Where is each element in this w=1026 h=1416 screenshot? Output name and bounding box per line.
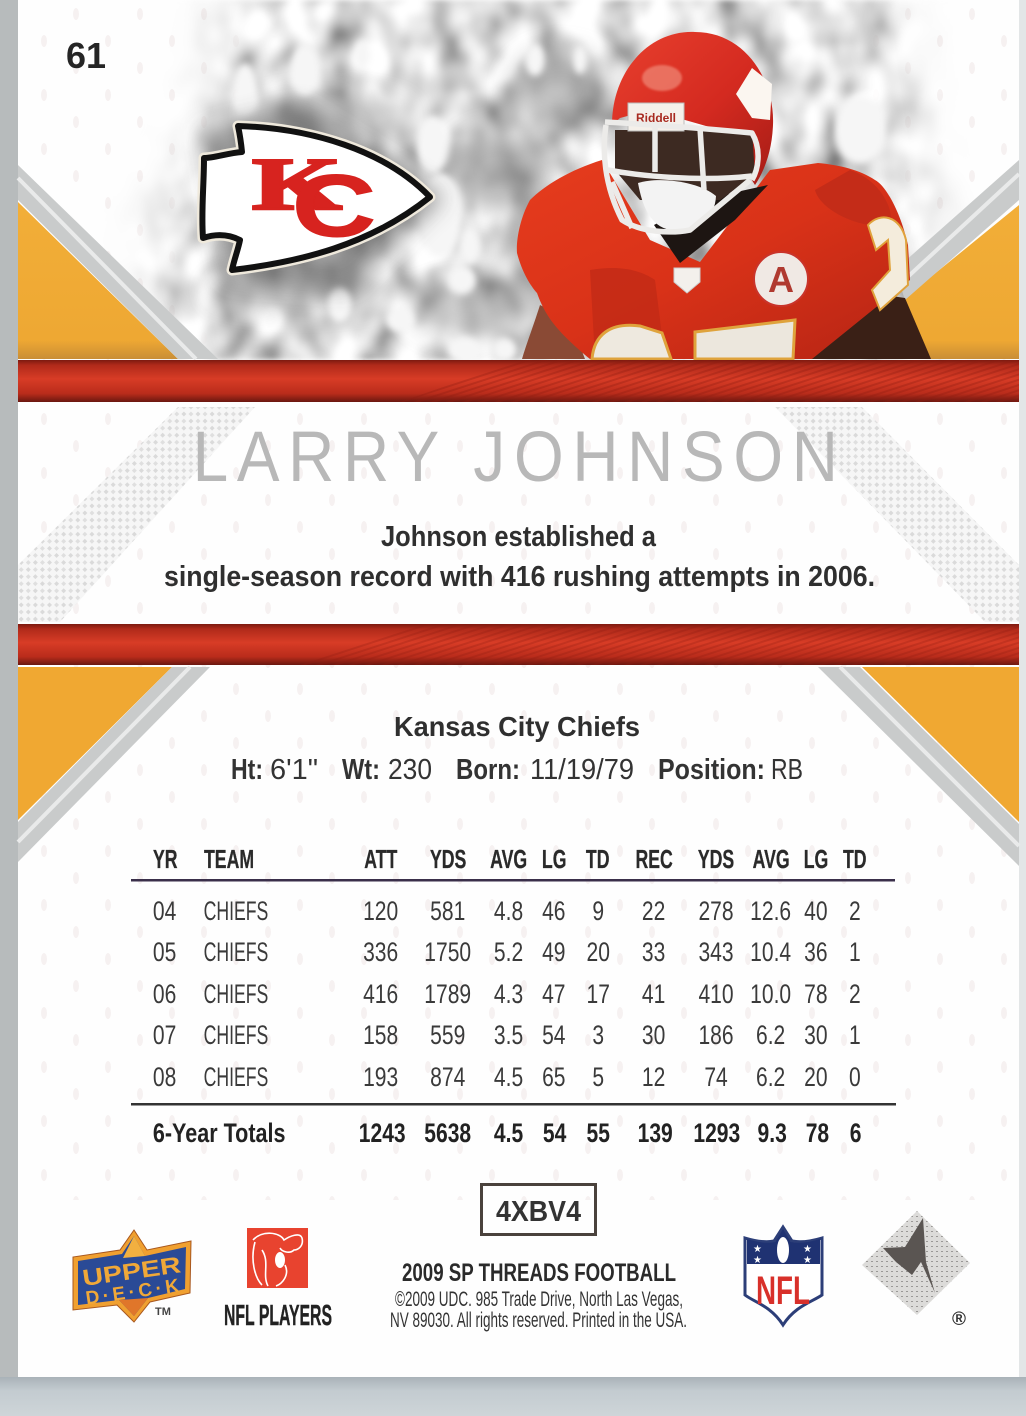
row 05: 336	[363, 938, 398, 968]
Riddell bumper: Riddell	[636, 111, 676, 125]
shoulder shading	[815, 170, 891, 226]
copyright: NV 89030. All rights reserved. Printed in the USA.	[390, 1309, 687, 1332]
bio text	[164, 521, 875, 593]
NFL Players logo	[224, 1228, 332, 1332]
table header: YDS	[430, 845, 466, 874]
row 08: 65	[542, 1063, 566, 1093]
table header: AVG	[490, 845, 527, 874]
panel: photo header	[18, 0, 1019, 402]
silver chevron: bottom right	[818, 667, 1019, 866]
left arm	[522, 305, 585, 359]
player vitals: Wt:	[342, 754, 380, 786]
helmet logo decal	[736, 68, 772, 120]
jersey	[517, 160, 910, 359]
team logo: Chiefs arrowhead	[200, 105, 445, 290]
row 08: 874	[430, 1063, 465, 1093]
set title: 2009 SP THREADS FOOTBALL	[402, 1259, 676, 1287]
totals row: 139	[638, 1119, 673, 1149]
row 07: 3.5	[494, 1021, 523, 1051]
table header: TEAM	[204, 845, 254, 874]
row 05: 1	[849, 938, 861, 968]
player vitals: 6'1"	[270, 754, 318, 786]
copyright: ©2009 UDC. 985 Trade Drive, North Las Vegas,	[395, 1288, 683, 1311]
NFL collar shield	[674, 268, 700, 293]
row 05: 20	[587, 938, 610, 968]
row 08: 4.5	[494, 1063, 523, 1093]
row 04: 04	[153, 897, 176, 927]
player vitals: Ht:	[231, 754, 263, 786]
copyright	[390, 1288, 687, 1332]
row 04: 9	[592, 897, 604, 927]
bio text: single-season record with 416 rushing attempts in 2006.	[164, 561, 875, 593]
red band: top	[18, 360, 1019, 402]
helmet highlight	[642, 65, 682, 91]
sleeve number	[868, 217, 908, 310]
totals row: 78	[806, 1119, 829, 1149]
row 08: 74	[704, 1063, 728, 1093]
totals row: 1293	[693, 1119, 740, 1149]
Upper Deck logo: D·E·C·K	[84, 1276, 181, 1309]
row 07: 30	[642, 1021, 665, 1051]
row 06: 416	[363, 980, 398, 1010]
row 04: 2	[849, 897, 861, 927]
row 05: 33	[642, 938, 665, 968]
row 07	[153, 1021, 861, 1051]
row 05: 10.4	[750, 938, 791, 968]
table header: YR	[153, 845, 178, 874]
row 04: 4.8	[494, 897, 523, 927]
totals row: 55	[587, 1119, 610, 1149]
row 04	[153, 897, 861, 927]
Upper Deck logo: TM	[155, 1306, 171, 1318]
totals row: 5638	[424, 1119, 471, 1149]
row 08	[153, 1063, 861, 1093]
row 08: 5	[592, 1063, 604, 1093]
team patch: A	[768, 259, 794, 300]
row 04: 46	[542, 897, 566, 927]
NFL Players logo: NFL PLAYERS	[224, 1300, 332, 1332]
authentication code box	[482, 1184, 596, 1234]
table header: REC	[636, 845, 673, 874]
NFL shield: ★	[753, 1255, 762, 1266]
table header: LG	[804, 845, 828, 874]
bio text: Johnson established a	[381, 521, 657, 553]
row 06: 1789	[424, 980, 471, 1010]
player vitals: Born:	[456, 754, 520, 786]
row 08: 6.2	[756, 1063, 785, 1093]
right arm	[800, 295, 931, 359]
totals row: 1243	[359, 1119, 406, 1149]
silver chevron: top left	[18, 165, 218, 359]
chin strap	[638, 180, 716, 230]
row 06	[153, 980, 861, 1010]
NFL shield: ★	[803, 1244, 812, 1255]
jersey shadow fold	[590, 268, 665, 359]
row 08: 193	[363, 1063, 398, 1093]
row 07: 07	[153, 1021, 176, 1051]
row 07: 3	[592, 1021, 604, 1051]
player vitals	[231, 754, 803, 786]
row 07: 559	[430, 1021, 465, 1051]
row 06: 06	[153, 980, 176, 1010]
NFL shield: NFL	[756, 1269, 810, 1313]
row 06: 4.3	[494, 980, 523, 1010]
row 04: 581	[430, 897, 465, 927]
player photo	[517, 32, 931, 359]
orange corner: bottom left	[18, 667, 172, 820]
totals row: 9.3	[758, 1119, 787, 1149]
row 07: 30	[804, 1021, 828, 1051]
player vitals: 230	[388, 754, 432, 786]
row 06: 10.0	[750, 980, 791, 1010]
totals row	[153, 1119, 862, 1149]
table header	[153, 845, 867, 874]
table header: TD	[586, 845, 609, 874]
Riddell bumper	[628, 103, 684, 131]
row 04: 120	[363, 897, 398, 927]
row 06: 2	[849, 980, 861, 1010]
row 06: 41	[642, 980, 665, 1010]
player vitals: RB	[771, 754, 803, 786]
registered mark: ®	[952, 1309, 966, 1330]
player vitals: Position:	[658, 754, 765, 786]
row 05: 343	[698, 938, 734, 968]
row 04: 12.6	[750, 897, 791, 927]
row 04: 40	[804, 897, 828, 927]
Upper Deck logo	[73, 1230, 191, 1322]
row 06: 78	[804, 980, 828, 1010]
row 08: CHIEFS	[204, 1063, 268, 1093]
table header: TD	[843, 845, 867, 874]
row 07: 158	[363, 1021, 398, 1051]
row 08: 0	[849, 1063, 861, 1093]
row 04: CHIEFS	[204, 897, 268, 927]
helmet shell	[612, 32, 773, 185]
authentication code box: 4XBV4	[496, 1196, 581, 1228]
totals row: 6	[850, 1119, 862, 1149]
diamond texture: left	[18, 407, 255, 622]
chest numeral 7	[695, 320, 795, 359]
row 04: 278	[698, 897, 734, 927]
NFL shield	[745, 1227, 822, 1325]
crowd photo background	[136, 0, 955, 360]
row 07: 54	[542, 1021, 566, 1051]
orange corner: bottom right	[862, 667, 1019, 822]
bottom shadow	[0, 1377, 1026, 1416]
row 07: 1	[849, 1021, 861, 1051]
silver chevron: bottom left	[18, 667, 210, 862]
row 05: CHIEFS	[204, 938, 268, 968]
KC letters: K	[252, 144, 342, 226]
totals row: 54	[543, 1119, 567, 1149]
Upper Deck logo: UPPER	[81, 1251, 183, 1291]
totals row: 4.5	[494, 1119, 523, 1149]
KC letters: C	[292, 156, 376, 255]
KC letters	[252, 144, 376, 255]
orange corner: top right	[905, 205, 1019, 359]
panel: footer	[73, 1184, 970, 1332]
team name: Kansas City Chiefs	[394, 711, 640, 742]
row 05: 1750	[424, 938, 471, 968]
row 08: 08	[153, 1063, 176, 1093]
row 06: 47	[542, 980, 566, 1010]
row 05: 05	[153, 938, 176, 968]
face mask	[604, 122, 758, 232]
row 05	[153, 938, 861, 968]
player name: LARRY JOHNSON	[193, 418, 838, 497]
silver chevron: top right	[895, 160, 1019, 300]
row 07: 6.2	[756, 1021, 785, 1051]
team patch	[754, 252, 808, 306]
diamond texture: right	[775, 407, 1019, 622]
totals rule	[131, 1103, 896, 1106]
chest numeral 2	[592, 325, 671, 359]
row 06: 17	[587, 980, 610, 1010]
row 05: 49	[542, 938, 566, 968]
neck collar	[654, 185, 768, 263]
row 08: 12	[642, 1063, 665, 1093]
NFL shield: ★	[803, 1255, 812, 1266]
NFL shield: ★	[753, 1244, 762, 1255]
hologram diamond	[862, 1211, 970, 1315]
row 07: CHIEFS	[204, 1021, 268, 1051]
row 05: 5.2	[494, 938, 523, 968]
red band: bottom	[18, 624, 1019, 665]
header rule	[131, 879, 895, 882]
table header: AVG	[753, 845, 790, 874]
table header: ATT	[364, 845, 398, 874]
stats table	[131, 845, 896, 1149]
card number: 61	[66, 35, 106, 76]
row 06: 410	[698, 980, 734, 1010]
left margin	[0, 0, 18, 1416]
panel: name and bio	[18, 407, 1019, 665]
panel: stats section	[18, 667, 1019, 1149]
table header: LG	[542, 845, 566, 874]
player vitals: 11/19/79	[530, 754, 634, 786]
row 08: 20	[804, 1063, 828, 1093]
table header: YDS	[698, 845, 734, 874]
row 06: CHIEFS	[204, 980, 268, 1010]
face	[615, 130, 755, 200]
row 05: 36	[804, 938, 828, 968]
orange corner: top left	[18, 202, 178, 359]
row 07: 186	[698, 1021, 734, 1051]
totals row: 6-Year Totals	[153, 1119, 285, 1149]
row 04: 22	[642, 897, 665, 927]
